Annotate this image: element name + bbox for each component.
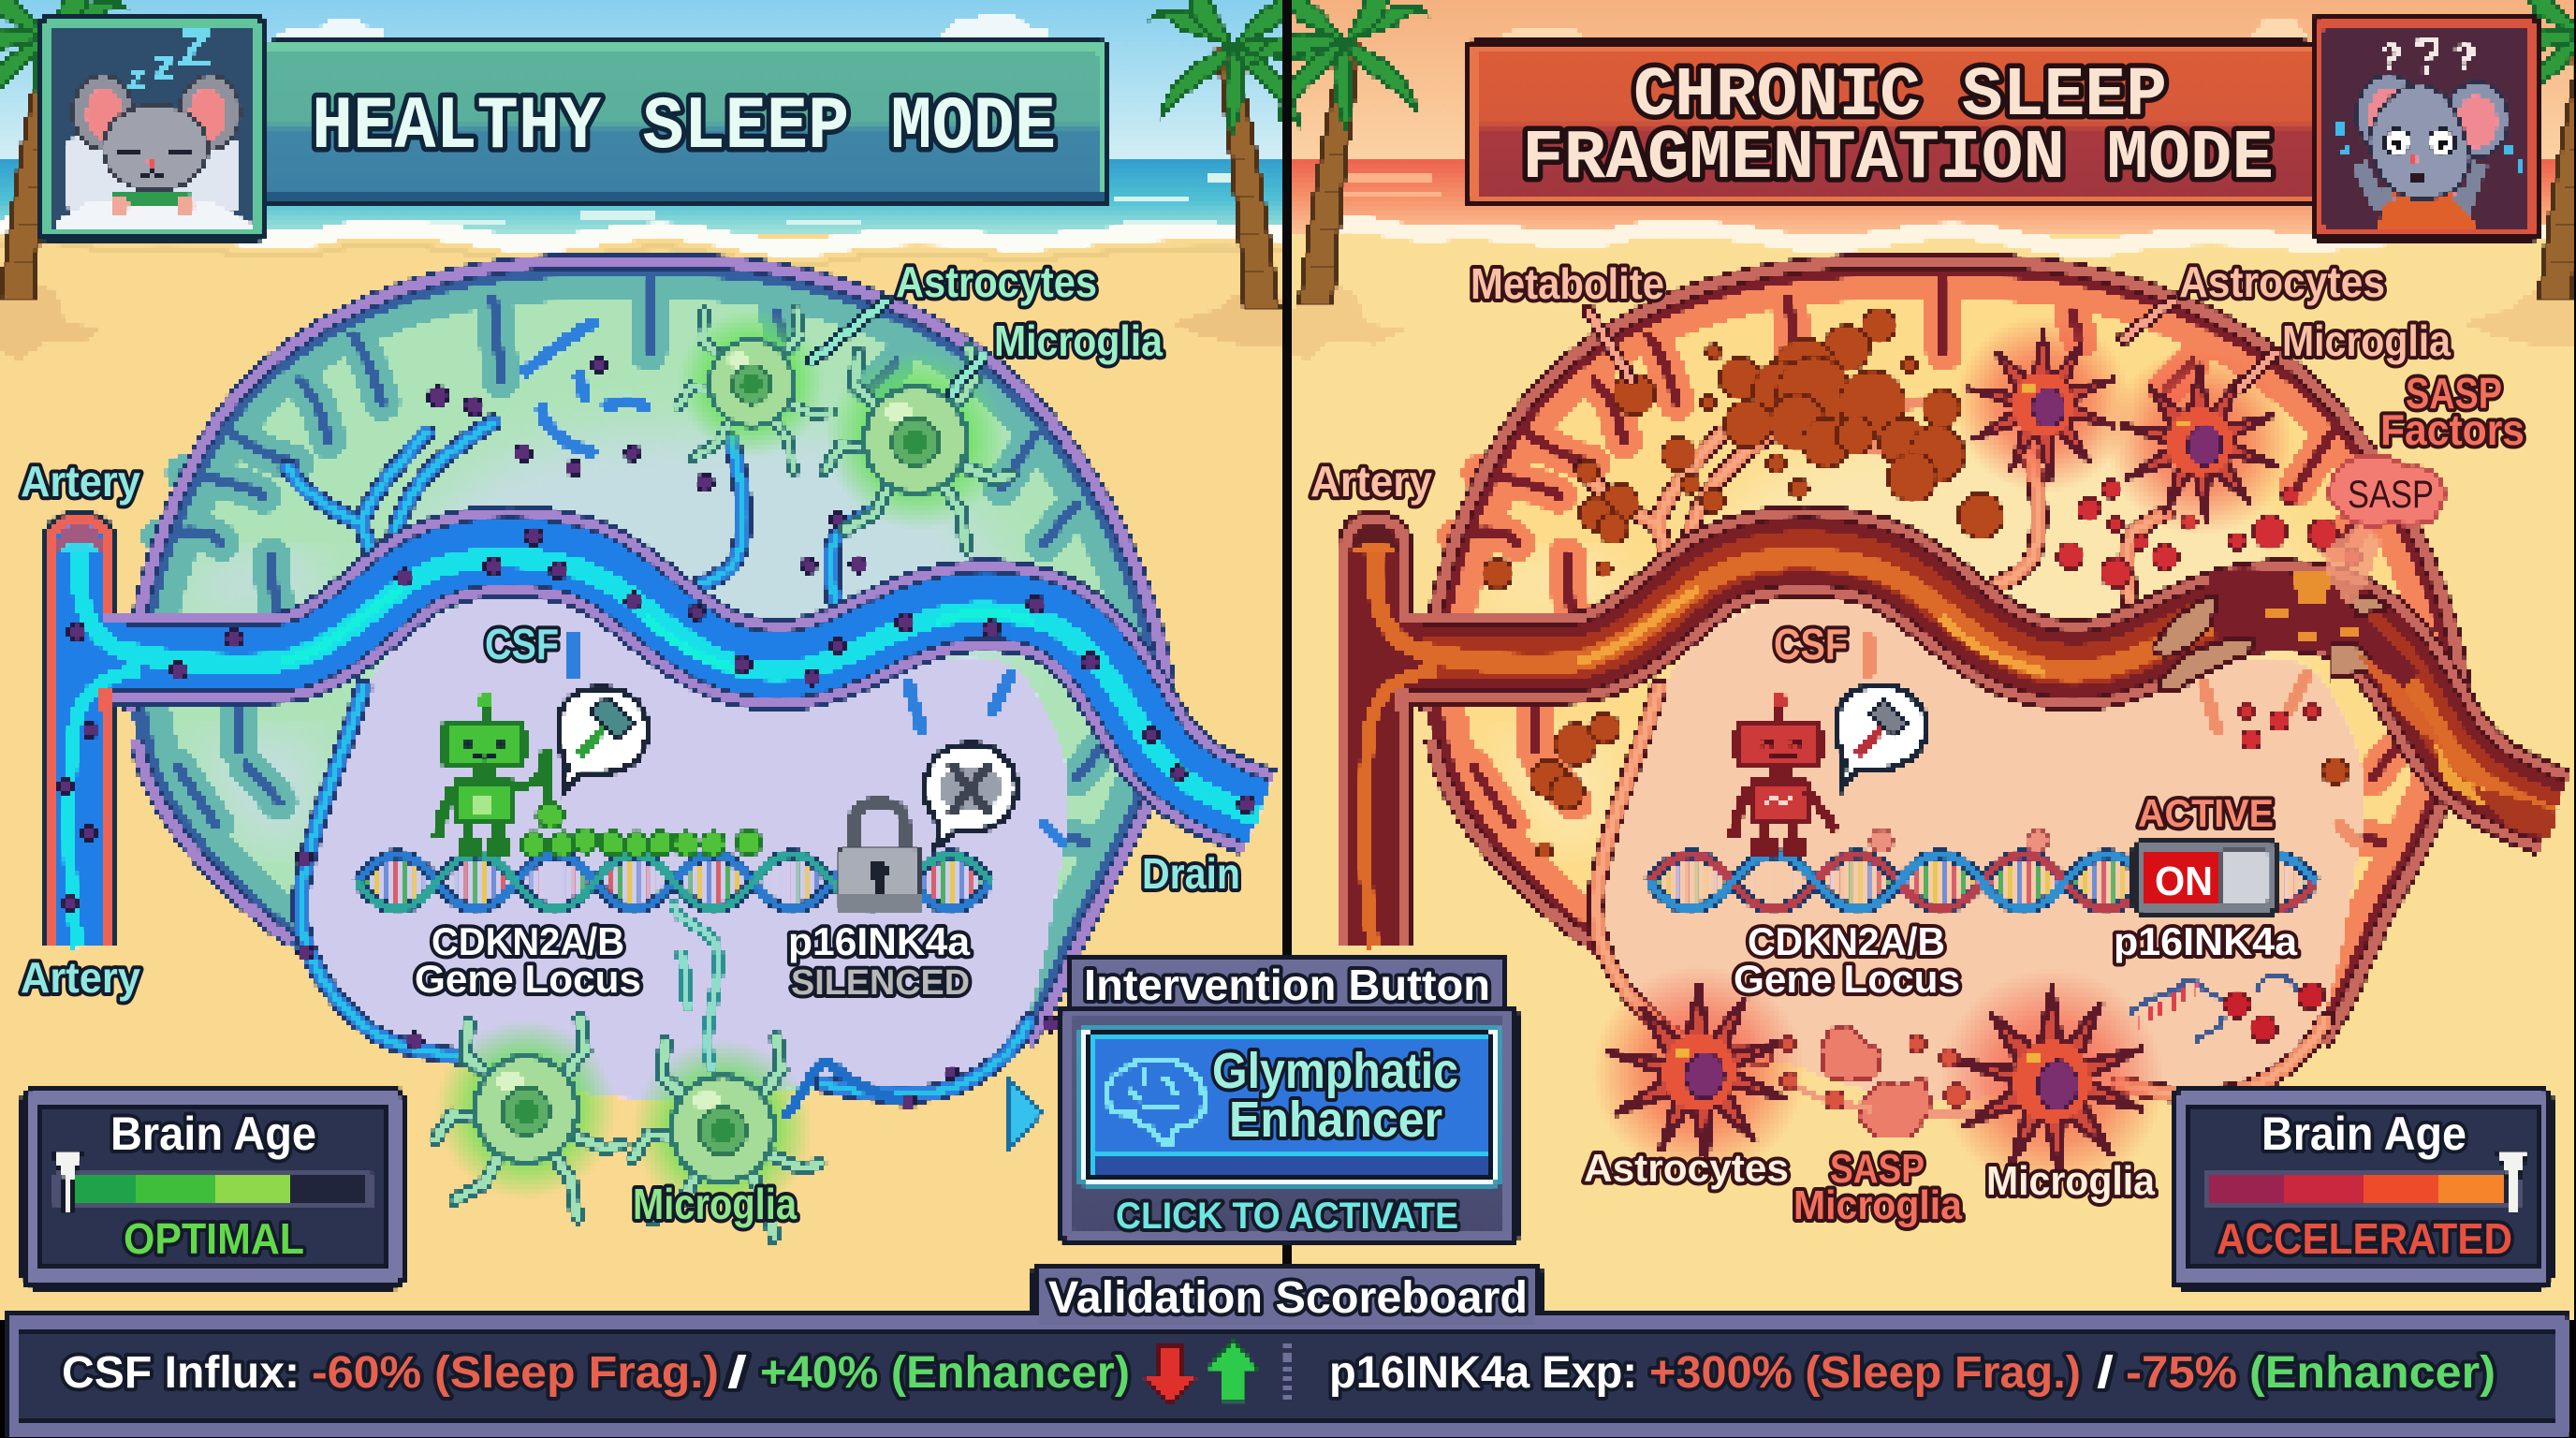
arrow to intervention button	[1007, 1078, 1043, 1150]
fragmented artery tube	[1337, 510, 1413, 947]
labels: fragmented panel: SASP	[1830, 1146, 1925, 1192]
toggle ON label: ON	[2155, 858, 2213, 904]
question marks: ?	[2411, 25, 2443, 84]
healthy hammer speech bubble	[560, 688, 648, 792]
labels: fragmented panel: CSF	[1774, 620, 1848, 668]
labels: healthy panel: Gene Locus	[415, 957, 641, 1001]
red hammer speech bubble	[1837, 685, 1926, 788]
mRNA squiggles and red balls	[2130, 975, 2324, 1042]
fragmented channel junction with artery	[1350, 552, 1511, 947]
panel: healthy beach background	[0, 0, 1284, 1320]
panel divider	[1282, 0, 1294, 1266]
scoreboard: CSF influx: CSF Influx:	[62, 1348, 300, 1398]
palm tree far left	[0, 0, 127, 300]
SASP cloud label: SASP	[2348, 472, 2434, 516]
healthy microglia top	[825, 349, 1012, 549]
labels: fragmented panel: Astrocytes	[2179, 257, 2385, 306]
sleep z letters: z	[153, 41, 175, 91]
sleep z letters: Z	[178, 19, 211, 80]
labels: fragmented panel: p16INK4a	[2114, 919, 2298, 963]
labels: healthy panel: CSF	[485, 620, 559, 668]
labels: fragmented panel: Gene Locus	[1734, 957, 1960, 1001]
labels: healthy panel: CDKN2A/B	[432, 919, 624, 963]
score divider	[1284, 1344, 1292, 1402]
header: healthy title banner	[267, 39, 1109, 208]
labels: fragmented panel: Factors	[2380, 405, 2525, 454]
labels: fragmented panel: Microglia	[1986, 1158, 2155, 1204]
scoreboard frame	[4, 1264, 2571, 1438]
healthy brain purple waste dots	[58, 358, 1255, 1109]
scoreboard: p16INK4a expression: /	[2097, 1348, 2114, 1398]
scoreboard: CSF influx: /	[727, 1348, 747, 1398]
healthy methyl beads on DNA	[521, 802, 761, 857]
fragmented DNA strand	[1649, 855, 2315, 909]
scoreboard: CSF influx: -60% (Sleep Frag.)	[312, 1348, 719, 1398]
header: fragmentation title banner	[1465, 39, 2313, 208]
healthy brain cross section	[66, 262, 1259, 1099]
palm tree far right	[2490, 0, 2576, 300]
fragmented brain cross section	[1361, 262, 2554, 1099]
damaged microglia bottom	[1939, 968, 2165, 1195]
score arrows	[1144, 1341, 1259, 1404]
brain age healthy text: Brain Age	[110, 1108, 316, 1160]
damaged microglia top	[2105, 347, 2294, 536]
labels: healthy panel: Astrocytes	[896, 257, 1097, 306]
labels: healthy panel: Microglia	[633, 1180, 797, 1228]
intervention button text: Intervention Button	[1084, 961, 1490, 1009]
SASP cloud	[2330, 456, 2444, 525]
damaged astrocyte bottom	[1592, 965, 1806, 1179]
metabolite pointer lines	[1588, 301, 2275, 389]
scoreboard: CSF influx	[62, 1348, 1130, 1398]
scoreboard: p16INK4a expression: +300% (Sleep Frag.)	[1649, 1348, 2081, 1398]
question marks: ?	[2452, 36, 2477, 80]
question marks: ?	[2378, 36, 2403, 80]
stressed mouse icon	[2310, 15, 2540, 242]
scoreboard: p16INK4a expression	[1329, 1348, 2496, 1398]
sleep z letters: z	[127, 59, 145, 98]
labels: fragmented panel: Artery	[1310, 457, 1432, 506]
labels: fragmented panel: ACTIVE	[2138, 791, 2274, 835]
healthy astrocyte top	[678, 309, 830, 472]
healthy artery tube	[41, 510, 118, 947]
intervention button text: Glymphatic	[1212, 1043, 1458, 1099]
button: glymphatic enhancer	[1076, 1024, 1503, 1187]
labels: fragmented panel: SASP	[2406, 369, 2502, 418]
intervention button text: Enhancer	[1229, 1092, 1442, 1148]
scoreboard: CSF influx: +40% (Enhancer)	[760, 1348, 1130, 1398]
labels: healthy panel: p16INK4a	[788, 919, 971, 963]
healthy channel junction with artery	[54, 552, 215, 947]
brain age accelerated text: ACCELERATED	[2217, 1214, 2512, 1263]
intervention button text	[1084, 961, 1490, 1237]
healthy microglia bottom	[632, 906, 899, 1238]
labels: fragmented panel: CDKN2A/B	[1748, 919, 1945, 963]
panel: brain age accelerated	[2170, 1086, 2554, 1290]
panel: intervention button frame	[1058, 955, 1519, 1246]
brain age healthy text	[110, 1108, 316, 1263]
SASP red dots	[2057, 479, 2361, 749]
palm tree right panel left edge	[1251, 0, 1427, 304]
healthy green robot	[438, 693, 546, 856]
labels: healthy panel: Drain	[1142, 849, 1240, 898]
labels: healthy panel	[21, 257, 1240, 1228]
healthy astrocyte bottom	[435, 1019, 622, 1217]
scoreboard title: Validation Scoreboard	[1048, 1273, 1528, 1323]
labels: fragmented panel	[1310, 257, 2525, 1228]
healthy pointer lines	[812, 301, 983, 393]
question marks	[2378, 25, 2477, 84]
healthy DNA strand	[358, 855, 990, 909]
brain age accelerated text	[2217, 1108, 2512, 1263]
scoreboard: p16INK4a expression: p16INK4a Exp:	[1329, 1348, 1637, 1398]
labels: healthy panel: Artery	[21, 953, 140, 1002]
brain age accelerated text: Brain Age	[2261, 1108, 2466, 1160]
labels: fragmented panel: Metabolite	[1471, 259, 1664, 308]
sleep z letters	[127, 19, 211, 98]
labels: healthy panel: SILENCED	[791, 963, 970, 1003]
damaged astrocyte top	[1954, 315, 2132, 493]
brain age healthy text: OPTIMAL	[124, 1214, 304, 1263]
ON toggle switch	[2134, 841, 2277, 914]
padlock	[838, 803, 920, 911]
palm tree left panel right edge	[1151, 0, 1327, 309]
title: chronic sleep fragmentation mode: FRAGMENTATION MODE	[1522, 120, 2274, 198]
labels: fragmented panel: Microglia	[2282, 316, 2451, 365]
healthy sleeping mouse icon	[37, 15, 266, 242]
panel: brain age healthy	[21, 1086, 406, 1290]
icon: brain outline	[1107, 1059, 1204, 1142]
pink beads on DNA	[1870, 829, 2049, 852]
intervention button text: CLICK TO ACTIVATE	[1116, 1196, 1458, 1237]
title: chronic sleep fragmentation mode: CHRONIC SLEEP	[1633, 57, 2167, 136]
SASP plume	[2321, 524, 2382, 609]
panel: fragmented beach background	[1294, 0, 2576, 1320]
labels: healthy panel: Artery	[21, 457, 140, 506]
labels: fragmented panel: Microglia	[1793, 1182, 1962, 1228]
red broken robot	[1734, 693, 1837, 856]
scoreboard: p16INK4a expression: (Enhancer)	[2249, 1348, 2496, 1398]
metabolite clump in cortex	[1483, 309, 2349, 858]
labels: healthy panel: Microglia	[994, 316, 1163, 365]
SASP protein clumps bottom	[1780, 1025, 1975, 1137]
blocked channel debris	[2153, 568, 2557, 838]
title: healthy sleep mode: HEALTHY SLEEP MODE	[312, 85, 1056, 170]
silenced X speech bubble	[925, 744, 1017, 847]
labels: fragmented panel: Astrocytes	[1584, 1146, 1789, 1190]
title: chronic sleep fragmentation mode	[1522, 57, 2274, 198]
scoreboard: p16INK4a expression: -75%	[2126, 1348, 2237, 1398]
